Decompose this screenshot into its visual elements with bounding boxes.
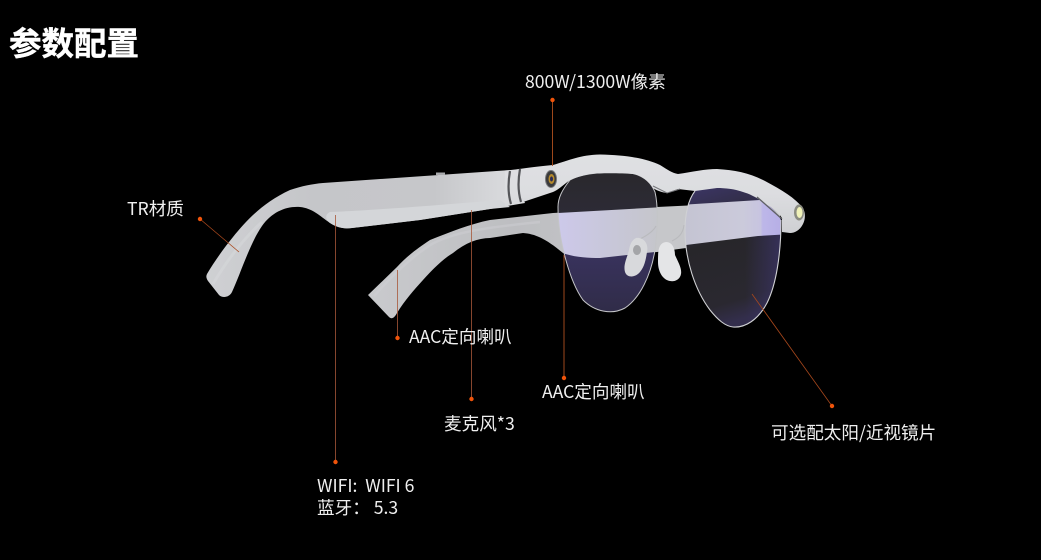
title: 参数配置 [9, 18, 139, 65]
label: rear speaker: AAC定向喇叭 [409, 324, 512, 348]
nose pads [624, 238, 681, 281]
callout line: rear speaker [395, 270, 400, 340]
label: connectivity: WIFI: WIFI 6 [317, 472, 414, 498]
callout line: camera [550, 98, 555, 166]
near temple arm [206, 170, 525, 297]
label: lenses: 可选配太阳/近视镜片 [771, 420, 936, 444]
label: connectivity [317, 472, 414, 520]
label: front speaker: AAC定向喇叭 [542, 378, 645, 404]
icon: front light [794, 204, 804, 220]
label: camera: 800W/1300W像素 [525, 68, 666, 94]
glasses illustration with callout lines [198, 98, 834, 464]
far temple arm [368, 201, 780, 318]
label: TR material: TR材质 [127, 196, 184, 220]
front frame [505, 154, 805, 233]
label: microphone: 麦克风*3 [444, 410, 515, 436]
callout line: TR material [198, 217, 239, 252]
callout line: WIFI [333, 215, 338, 464]
callout line: lenses [752, 294, 834, 408]
left lens [558, 173, 658, 312]
icon: camera [546, 170, 556, 188]
nose bridge wires [640, 225, 684, 241]
label: connectivity: 蓝牙： 5.3 [317, 494, 398, 520]
callout line: front speaker [562, 255, 566, 380]
callout line: microphone [469, 210, 474, 401]
right lens [684, 188, 782, 328]
